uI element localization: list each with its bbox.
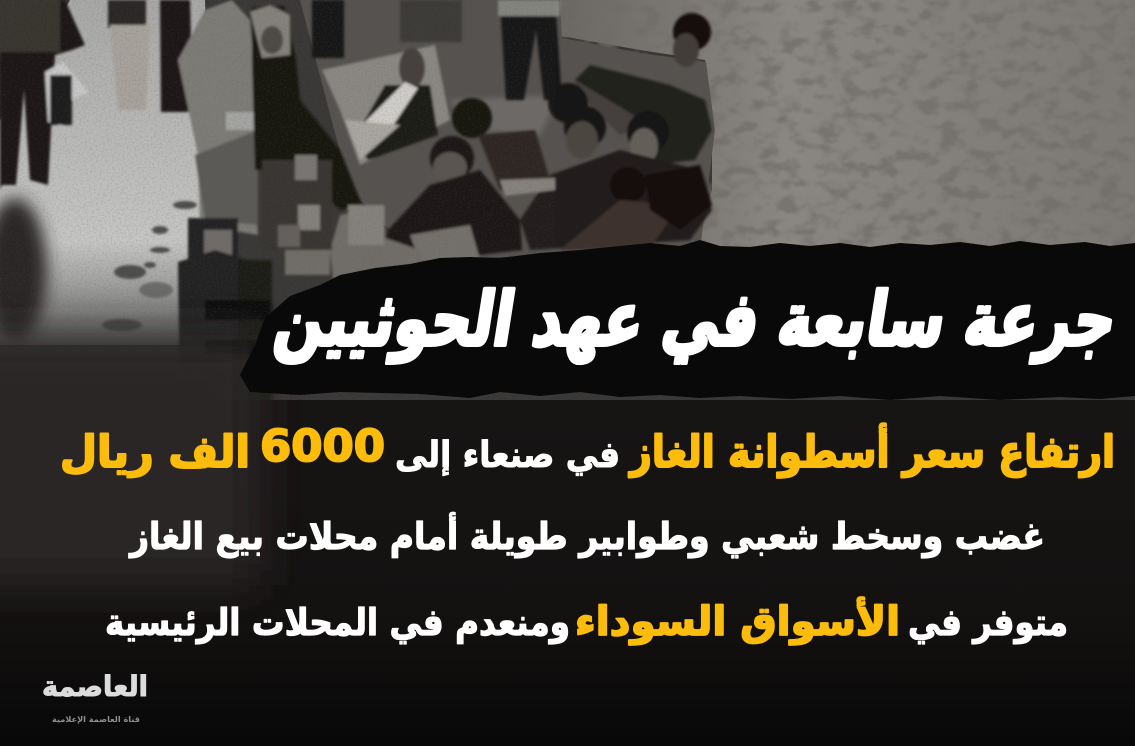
headline line: gas price rise: الف ريال [60, 427, 250, 478]
headline line: gas price rise [60, 421, 1115, 478]
wall [555, 0, 1135, 250]
background photo: queue for gas cylinders [0, 0, 1135, 420]
logo: Al-Asima [42, 670, 148, 724]
lower dark panel [0, 400, 1135, 746]
street [0, 0, 215, 345]
logo: Al-Asima: العاصمة [42, 670, 148, 703]
rocks on the street [102, 201, 197, 331]
man seated in white [322, 45, 450, 165]
woman in dark dress [252, 6, 362, 210]
text line: black market availability [105, 596, 1068, 645]
text line: black market availability: متوفر في [908, 601, 1068, 644]
headline line: gas price rise: 6000 [260, 421, 385, 472]
pedestrians top-left [0, 0, 85, 190]
blurred foreground heads [0, 198, 47, 342]
logo: Al-Asima: قناة العاصمة الإعلامية [52, 715, 140, 724]
gas cylinders [330, 205, 420, 300]
background ground behind the people [300, 0, 715, 260]
photo grain [0, 0, 555, 400]
headline line: gas price rise: في صنعاء إلى [395, 435, 620, 476]
soft dark fade at bottom-left [0, 335, 260, 585]
text line: public anger and queues: غضب وسخط شعبي وطوابير طويلة أمام محلات بيع الغاز [128, 512, 1045, 559]
children along the wall [575, 65, 712, 165]
text line: black market availability: ومنعدم في المحلات الرئيسية [105, 601, 570, 645]
torn black title band [240, 240, 1135, 400]
man in grey coat [178, 0, 258, 235]
text line: black market availability: الأسواق السوداء [575, 596, 900, 645]
